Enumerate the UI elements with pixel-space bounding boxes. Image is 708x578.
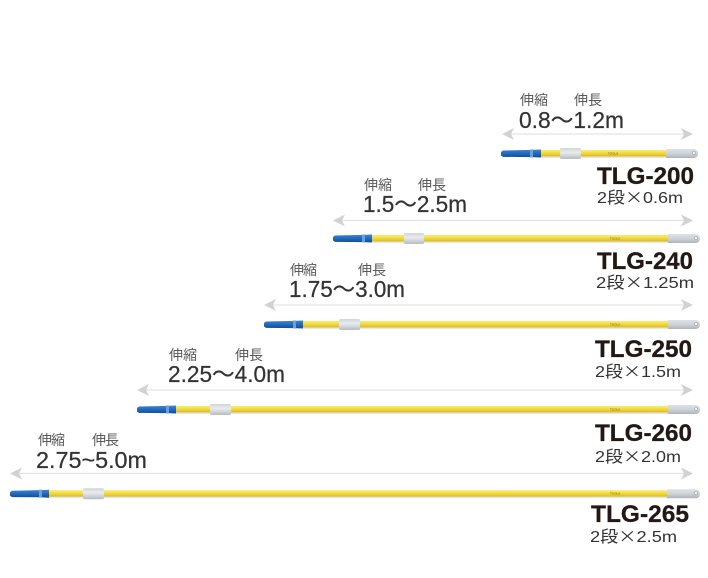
double arrow TLG-250: [264, 299, 693, 311]
spec TLG-250: 2段×1.5m: [595, 358, 681, 382]
pole TLG-260: TOOLS: [610, 408, 620, 412]
model name TLG-200: TLG-200: [597, 163, 694, 190]
pole TLG-240: [333, 233, 700, 244]
range labels TLG-265: 伸長: [92, 432, 119, 448]
entry: TLG-250: [264, 262, 700, 382]
model name TLG-265: TLG-265: [591, 501, 689, 528]
double arrow TLG-200: [502, 128, 693, 140]
range labels TLG-200: 伸長: [574, 92, 602, 108]
range labels TLG-240: [364, 177, 446, 193]
entry: TLG-260: [137, 347, 700, 467]
spec TLG-260: 2段×2.0m: [595, 443, 681, 467]
pole TLG-240: TOOLS: [610, 236, 620, 240]
range value TLG-265: 2.75~5.0m: [36, 447, 147, 473]
range labels TLG-250: 伸長: [358, 262, 386, 278]
pole TLG-250: [264, 319, 700, 330]
pole TLG-250: TOOLS: [610, 322, 620, 326]
double arrow TLG-240: [333, 214, 693, 226]
range labels TLG-265: 伸縮: [38, 432, 65, 448]
range labels TLG-200: 伸縮: [520, 92, 548, 108]
pole TLG-260: [137, 404, 700, 415]
range value TLG-240: 1.5～2.5m: [363, 191, 467, 217]
entry: TLG-265: [10, 432, 700, 547]
spec TLG-200: 2段×0.6m: [597, 184, 683, 208]
spec TLG-265: 2段×2.5m: [590, 523, 677, 547]
range labels TLG-250: 伸縮: [290, 262, 317, 278]
model name TLG-240: TLG-240: [597, 248, 693, 275]
pole TLG-200: [501, 148, 698, 159]
range value TLG-250: 1.75～3.0m: [289, 276, 405, 302]
pole TLG-265: TOOLS: [610, 492, 620, 496]
entry: TLG-200: [501, 92, 698, 208]
range labels TLG-250: [290, 262, 386, 278]
range labels TLG-260: 伸縮: [169, 347, 197, 363]
model name TLG-250: TLG-250: [595, 336, 692, 363]
range labels TLG-240: 伸長: [418, 177, 446, 193]
pole TLG-265: [10, 488, 700, 499]
range value TLG-260: 2.25～4.0m: [168, 361, 285, 387]
spec TLG-240: 2段×1.25m: [596, 269, 694, 293]
double arrow TLG-260: [137, 384, 693, 396]
range labels TLG-200: [520, 92, 602, 108]
range labels TLG-265: [38, 432, 119, 448]
model name TLG-260: TLG-260: [595, 420, 692, 447]
range labels TLG-260: 伸長: [235, 347, 263, 363]
entry: TLG-240: [333, 177, 700, 293]
range value TLG-200: 0.8～1.2m: [519, 107, 624, 133]
double arrow TLG-265: [10, 468, 693, 480]
range labels TLG-260: [169, 347, 263, 363]
range labels TLG-240: 伸縮: [364, 177, 392, 193]
pole TLG-200: TOOLS: [608, 152, 618, 156]
